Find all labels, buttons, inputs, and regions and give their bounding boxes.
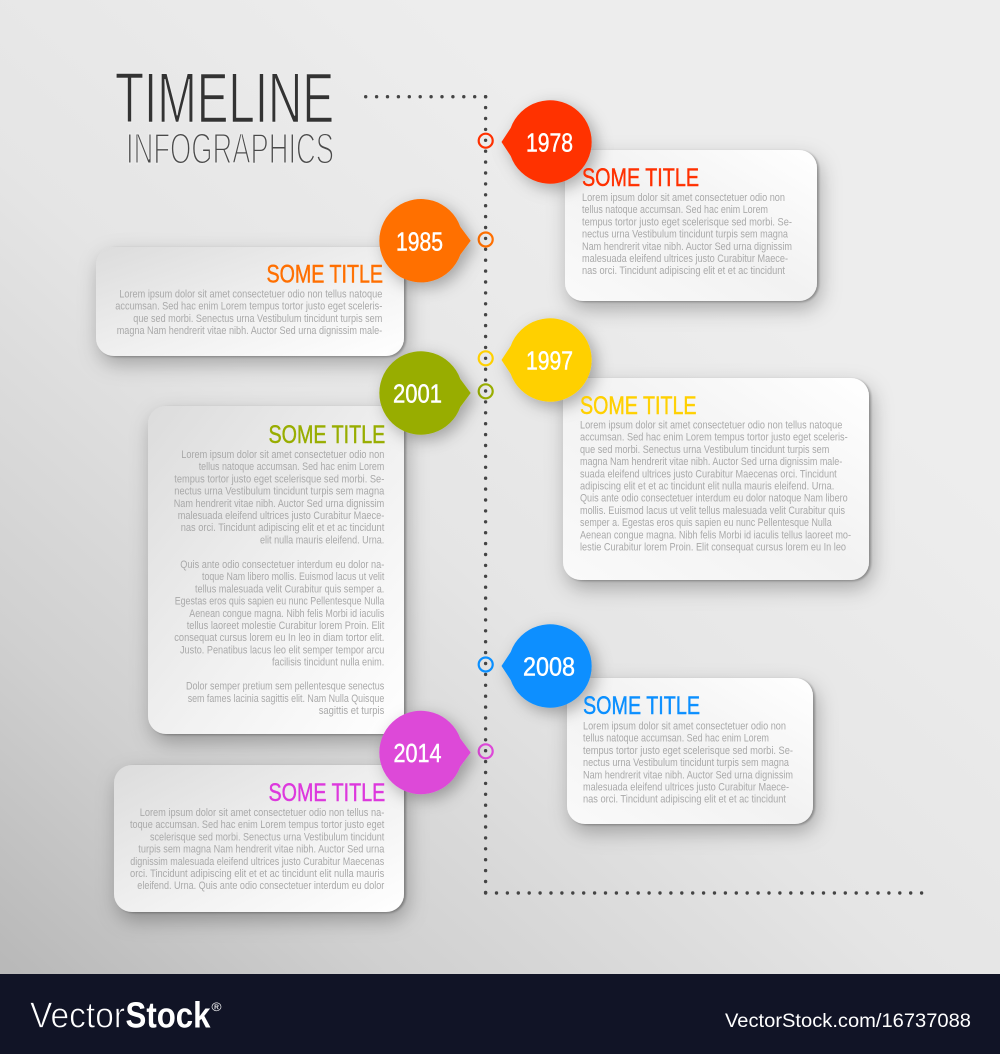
body text: nectus urna Vestibulum tincidunt turpis sem magna [174,486,385,498]
event: 2014 [114,711,471,912]
footer logo: ® [212,1000,222,1014]
body text [174,449,385,717]
body text: Quis ante odio consectetuer interdum eu dolor na- [180,559,385,571]
body text: elit nulla mauris eleifend. Urna. [260,534,384,546]
body text [583,720,793,806]
body text: tellus natoque accumsan. Sed hac enim Lorem [582,204,768,216]
body text: Nam hendrerit vitae nibh. Auctor Sed urna dignissim [583,769,793,781]
title [115,60,334,174]
body text: nectus urna Vestibulum tincidunt turpis sem magna [582,229,789,241]
body text: sem fames lacinia sagittis elit. Nam Nulla Quisque [188,693,384,705]
body text: toque Nam libero mollis. Euismod lacus ut velit [202,571,384,583]
event: 2001 [148,351,471,734]
body text: magna Nam hendrerit vitae nibh. Auctor Sed urna dignissim male- [117,325,382,337]
body text: Lorem ipsum dolor sit amet consectetuer odio non [181,449,384,461]
body text: magna Nam hendrerit vitae nibh. Auctor Sed urna dignissim male- [580,456,843,468]
body text: tempus tortor justo eget scelerisque sed morbi. Se- [583,745,793,757]
timeline markers [479,134,493,758]
body text: nas orci. Tincidunt adipiscing elit et et ac tincidunt [582,265,785,277]
body text: toque accumsan. Sed hac enim Lorem tempus tortor justo eget [130,819,384,831]
body text: suada eleifend ultrices justo Curabitur Maecenas orci. Tincidunt [580,468,837,480]
card [567,678,813,824]
card [148,406,404,734]
event: 1985 [96,199,471,356]
body text: que sed morbi. Senectus urna Vestibulum tincidunt turpis sem [133,313,382,325]
body text: Egestas eros quis sapien eu nunc Pellentesque Nulla [175,596,385,608]
body text: Nam hendrerit vitae nibh. Auctor Sed urna dignissim [582,241,792,253]
heading: SOME TITLE [266,261,383,289]
body text: que sed morbi. Senectus urna Vestibulum tincidunt turpis sem [580,444,829,456]
body text: Lorem ipsum dolor sit amet consectetuer odio non tellus natoque [119,288,382,300]
body text: Aenean congue magna. Nibh felis Morbi id iaculis tellus laoreet mo- [580,529,851,541]
body text [130,807,385,892]
heading: SOME TITLE [580,392,696,420]
body text: nectus urna Vestibulum tincidunt turpis sem magna [583,757,790,769]
bubble: 1978: 1978 [526,128,573,158]
body text: Justo. Penatibus lacus leo elit semper tempor arcu [180,644,384,656]
body text: nas orci. Tincidunt adipiscing elit et et ac tincidunt [181,522,384,534]
body text: nas orci. Tincidunt adipiscing elit et et ac tincidunt [583,794,786,806]
body text: Lorem ipsum dolor sit amet consectetuer odio non tellus natoque [580,420,842,432]
bubble: 1985: 1985 [396,226,443,256]
heading: SOME TITLE [583,692,700,720]
bubble: 2001: 2001 [393,378,442,408]
body text: orci. Tincidunt adipiscing elit et et ac tincidunt elit nulla mauris [130,868,385,880]
body text: mollis. Euismod lacus ut velit tellus malesuada velit Curabitur quis [580,505,845,517]
body text: adipiscing elit et et ac tincidunt elit nulla mauris eleifend. Urna. [580,480,834,492]
event: 1997 [502,318,869,580]
footer bar [0,974,1000,1054]
bubble: 1985 [379,199,471,282]
body text: lestie Curabitur lorem Proin. Elit consequat cursus lorem eu In leo [580,542,846,554]
body text: Lorem ipsum dolor sit amet consectetuer odio non [583,720,786,732]
body text: facilisis tincidunt nulla enim. [272,657,384,669]
body text: malesuada eleifend ultrices justo Curabitur Maece- [582,253,788,265]
body text: scelerisque sed morbi. Senectus urna Vestibulum tincidunt [150,831,384,843]
body text: accumsan. Sed hac enim Lorem tempus tortor justo eget sceleris- [115,301,383,313]
heading: SOME TITLE [268,421,385,449]
body text: turpis sem magna Nam hendrerit vitae nibh. Auctor Sed urna [138,844,385,856]
body text [582,192,792,277]
body text: accumsan. Sed hac enim Lorem tempus tortor justo eget sceleris- [580,432,848,444]
body text: tellus natoque accumsan. Sed hac enim Lorem [199,461,384,473]
footer logo: Vector [30,994,125,1036]
card [565,150,817,301]
card [96,247,404,356]
dotted timeline [365,97,923,893]
body text: tellus laoreet molestie Curabitur lorem Proin. Elit [187,620,384,632]
body text [580,420,851,554]
bubble: 2001 [379,351,471,435]
body text: Aenean congue magna. Nibh felis Morbi id iaculis [189,608,385,620]
body text: malesuada eleifend ultrices justo Curabitur Maece- [178,510,385,522]
body text: eleifend. Urna. Quis ante odio consectetuer interdum eu dolor [137,880,385,892]
title line: INFOGRAPHICS: INFOGRAPHICS [126,124,334,174]
body text: consequat cursus lorem eu In leo in diam tortor elit. [174,632,384,644]
title line: TIMELINE: TIMELINE [115,60,334,138]
body text: dignissim malesuada eleifend ultrices justo Curabitur Maecenas [130,856,385,868]
card [114,765,404,912]
body text: Dolor semper pretium sem pellentesque senectus [186,681,385,693]
event: 2008 [502,624,813,824]
bubble: 1997: 1997 [526,346,573,376]
bubble: 2014: 2014 [394,738,442,768]
footer logo: Stock [126,994,211,1036]
body text: sagittis et turpis [319,705,385,717]
body text: tellus malesuada velit Curabitur quis semper a. [195,583,384,595]
footer url: VectorStock.com/16737088 [725,1010,971,1032]
body text: Lorem ipsum dolor sit amet consectetuer odio non tellus na- [140,807,385,819]
body text: Quis ante odio consectetuer interdum eu dolor natoque Nam libero [580,493,848,505]
body text: malesuada eleifend ultrices justo Curabitur Maece- [583,782,789,794]
bubble: 1978 [502,100,592,184]
bubble: 1997 [502,318,592,402]
event: 1978 [502,100,817,301]
body text: tempus tortor justo eget scelerisque sed morbi. Se- [582,216,792,228]
body text: semper a. Egestas eros quis sapien eu nunc Pellentesque Nulla [580,517,832,529]
footer logo [30,994,222,1036]
bubble: 2014 [379,711,471,794]
body text: tellus natoque accumsan. Sed hac enim Lorem [583,733,769,745]
bubble: 2008 [502,624,592,708]
card [563,378,869,580]
body text: tempus tortor justo eget scelerisque sed morbi. Se- [174,473,385,485]
heading: SOME TITLE [582,164,699,192]
body text [115,288,383,337]
body text: Nam hendrerit vitae nibh. Auctor Sed urna dignissim [174,498,384,510]
body text: Lorem ipsum dolor sit amet consectetuer odio non [582,192,785,204]
bubble: 2008: 2008 [523,652,575,682]
heading: SOME TITLE [268,779,385,807]
